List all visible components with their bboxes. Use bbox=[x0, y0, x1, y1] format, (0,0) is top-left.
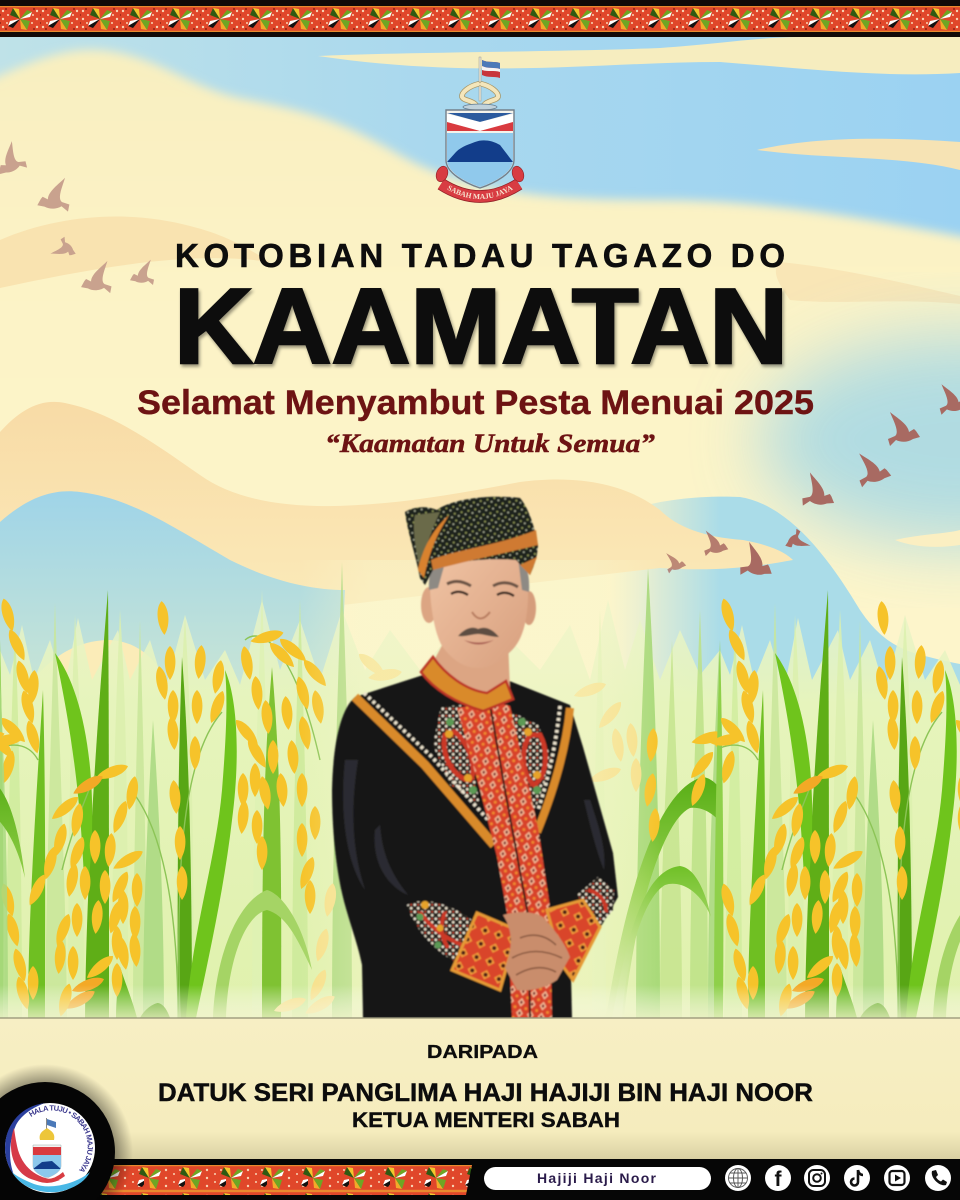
emblem ribbon: SABAH MAJU JAYA bbox=[447, 186, 513, 200]
tile repeat left bbox=[0, 674, 25, 1017]
left chest motif bbox=[433, 705, 480, 806]
emblem shield bbox=[446, 110, 514, 188]
tile repeat right bbox=[709, 562, 960, 1018]
lower peach wave bbox=[0, 402, 793, 610]
sender title: KETUA MENTERI SABAH bbox=[352, 1109, 620, 1132]
jagged pale blade layer bbox=[0, 600, 720, 1018]
sender name: DATUK SERI PANGLIMA HAJI HAJIJI BIN HAJI NOOR bbox=[158, 1079, 813, 1107]
logo emblem bbox=[29, 1118, 65, 1183]
cream hump in field bbox=[56, 640, 158, 680]
icon: tiktok bbox=[844, 1165, 870, 1191]
logo badge: Hala Tuju Sabah Maju Jaya bbox=[0, 1066, 131, 1200]
rice stalks bbox=[0, 636, 320, 1018]
collar bbox=[421, 657, 513, 711]
icon: phone bbox=[925, 1165, 951, 1191]
icon: Sabah state emblem bbox=[436, 56, 524, 203]
background: sky and clouds bbox=[0, 37, 960, 685]
emblem ribbon bbox=[436, 166, 524, 203]
upper-right sky glow bbox=[760, 335, 960, 545]
fog at foot of field bbox=[0, 985, 960, 1020]
icon: website globe bbox=[725, 1165, 751, 1191]
bright curved leaves bbox=[55, 653, 237, 1018]
emblem arms bbox=[462, 84, 498, 105]
name pill: Hajiji Haji Noor bbox=[537, 1170, 657, 1186]
central embroidered strip bbox=[457, 700, 552, 1018]
small right cloud bbox=[895, 530, 960, 547]
festival theme quote: “Kaamatan Untuk Semua” bbox=[325, 429, 655, 458]
strip centre line bbox=[490, 705, 530, 1018]
emblem flag bbox=[479, 57, 500, 101]
shoulder trims bbox=[355, 693, 570, 845]
flying birds right bbox=[665, 384, 960, 582]
icon: facebook: f bbox=[774, 1168, 782, 1191]
right blue hill bbox=[625, 496, 960, 685]
flying birds left bbox=[0, 140, 154, 296]
greeting line: Selamat Menyambut Pesta Menuai 2025 bbox=[137, 384, 814, 422]
neck bbox=[432, 640, 510, 706]
head bbox=[421, 548, 536, 668]
green mounds at base bbox=[140, 1003, 170, 1018]
dark green blades bbox=[0, 590, 281, 1018]
name pill bbox=[484, 1167, 711, 1190]
robe satin highlights bbox=[343, 760, 604, 895]
songkok headwrap bbox=[405, 497, 538, 585]
logo badge: Hala Tuju Sabah Maju Jaya: HALA TUJU • SABAH MAJU JAYA bbox=[28, 1105, 93, 1172]
footer panel bbox=[0, 1017, 960, 1160]
repeating rice tile bbox=[0, 562, 745, 1018]
icon: youtube bbox=[884, 1165, 910, 1191]
left sleeve embroidery bbox=[407, 901, 478, 963]
footer label: DARIPADA bbox=[427, 1042, 538, 1062]
icon: instagram bbox=[804, 1165, 830, 1191]
golden rice grains bbox=[0, 597, 737, 1018]
main title: KAAMATAN bbox=[174, 266, 788, 386]
bottom black bar bbox=[90, 1159, 960, 1200]
right cuff bbox=[547, 900, 600, 980]
rice field illustration bbox=[0, 560, 960, 1020]
top woven border bbox=[0, 0, 960, 37]
clasped hands bbox=[503, 912, 570, 991]
right chest motif bbox=[512, 712, 552, 810]
icon: facebook bbox=[765, 1165, 791, 1191]
pale glow behind portrait bbox=[300, 560, 660, 1020]
arched leaves bbox=[213, 777, 745, 1018]
right sleeve embroidery bbox=[577, 877, 614, 925]
robe bbox=[332, 675, 618, 1018]
portrait: Chief Minister in traditional dress bbox=[332, 497, 618, 1018]
pale background blades bbox=[4, 562, 728, 1018]
faded rice grains bbox=[272, 650, 641, 1018]
left blue hill bbox=[0, 491, 345, 700]
left cuff bbox=[452, 913, 517, 990]
subtitle heading: KOTOBIAN TADAU TAGAZO DO bbox=[175, 237, 785, 274]
